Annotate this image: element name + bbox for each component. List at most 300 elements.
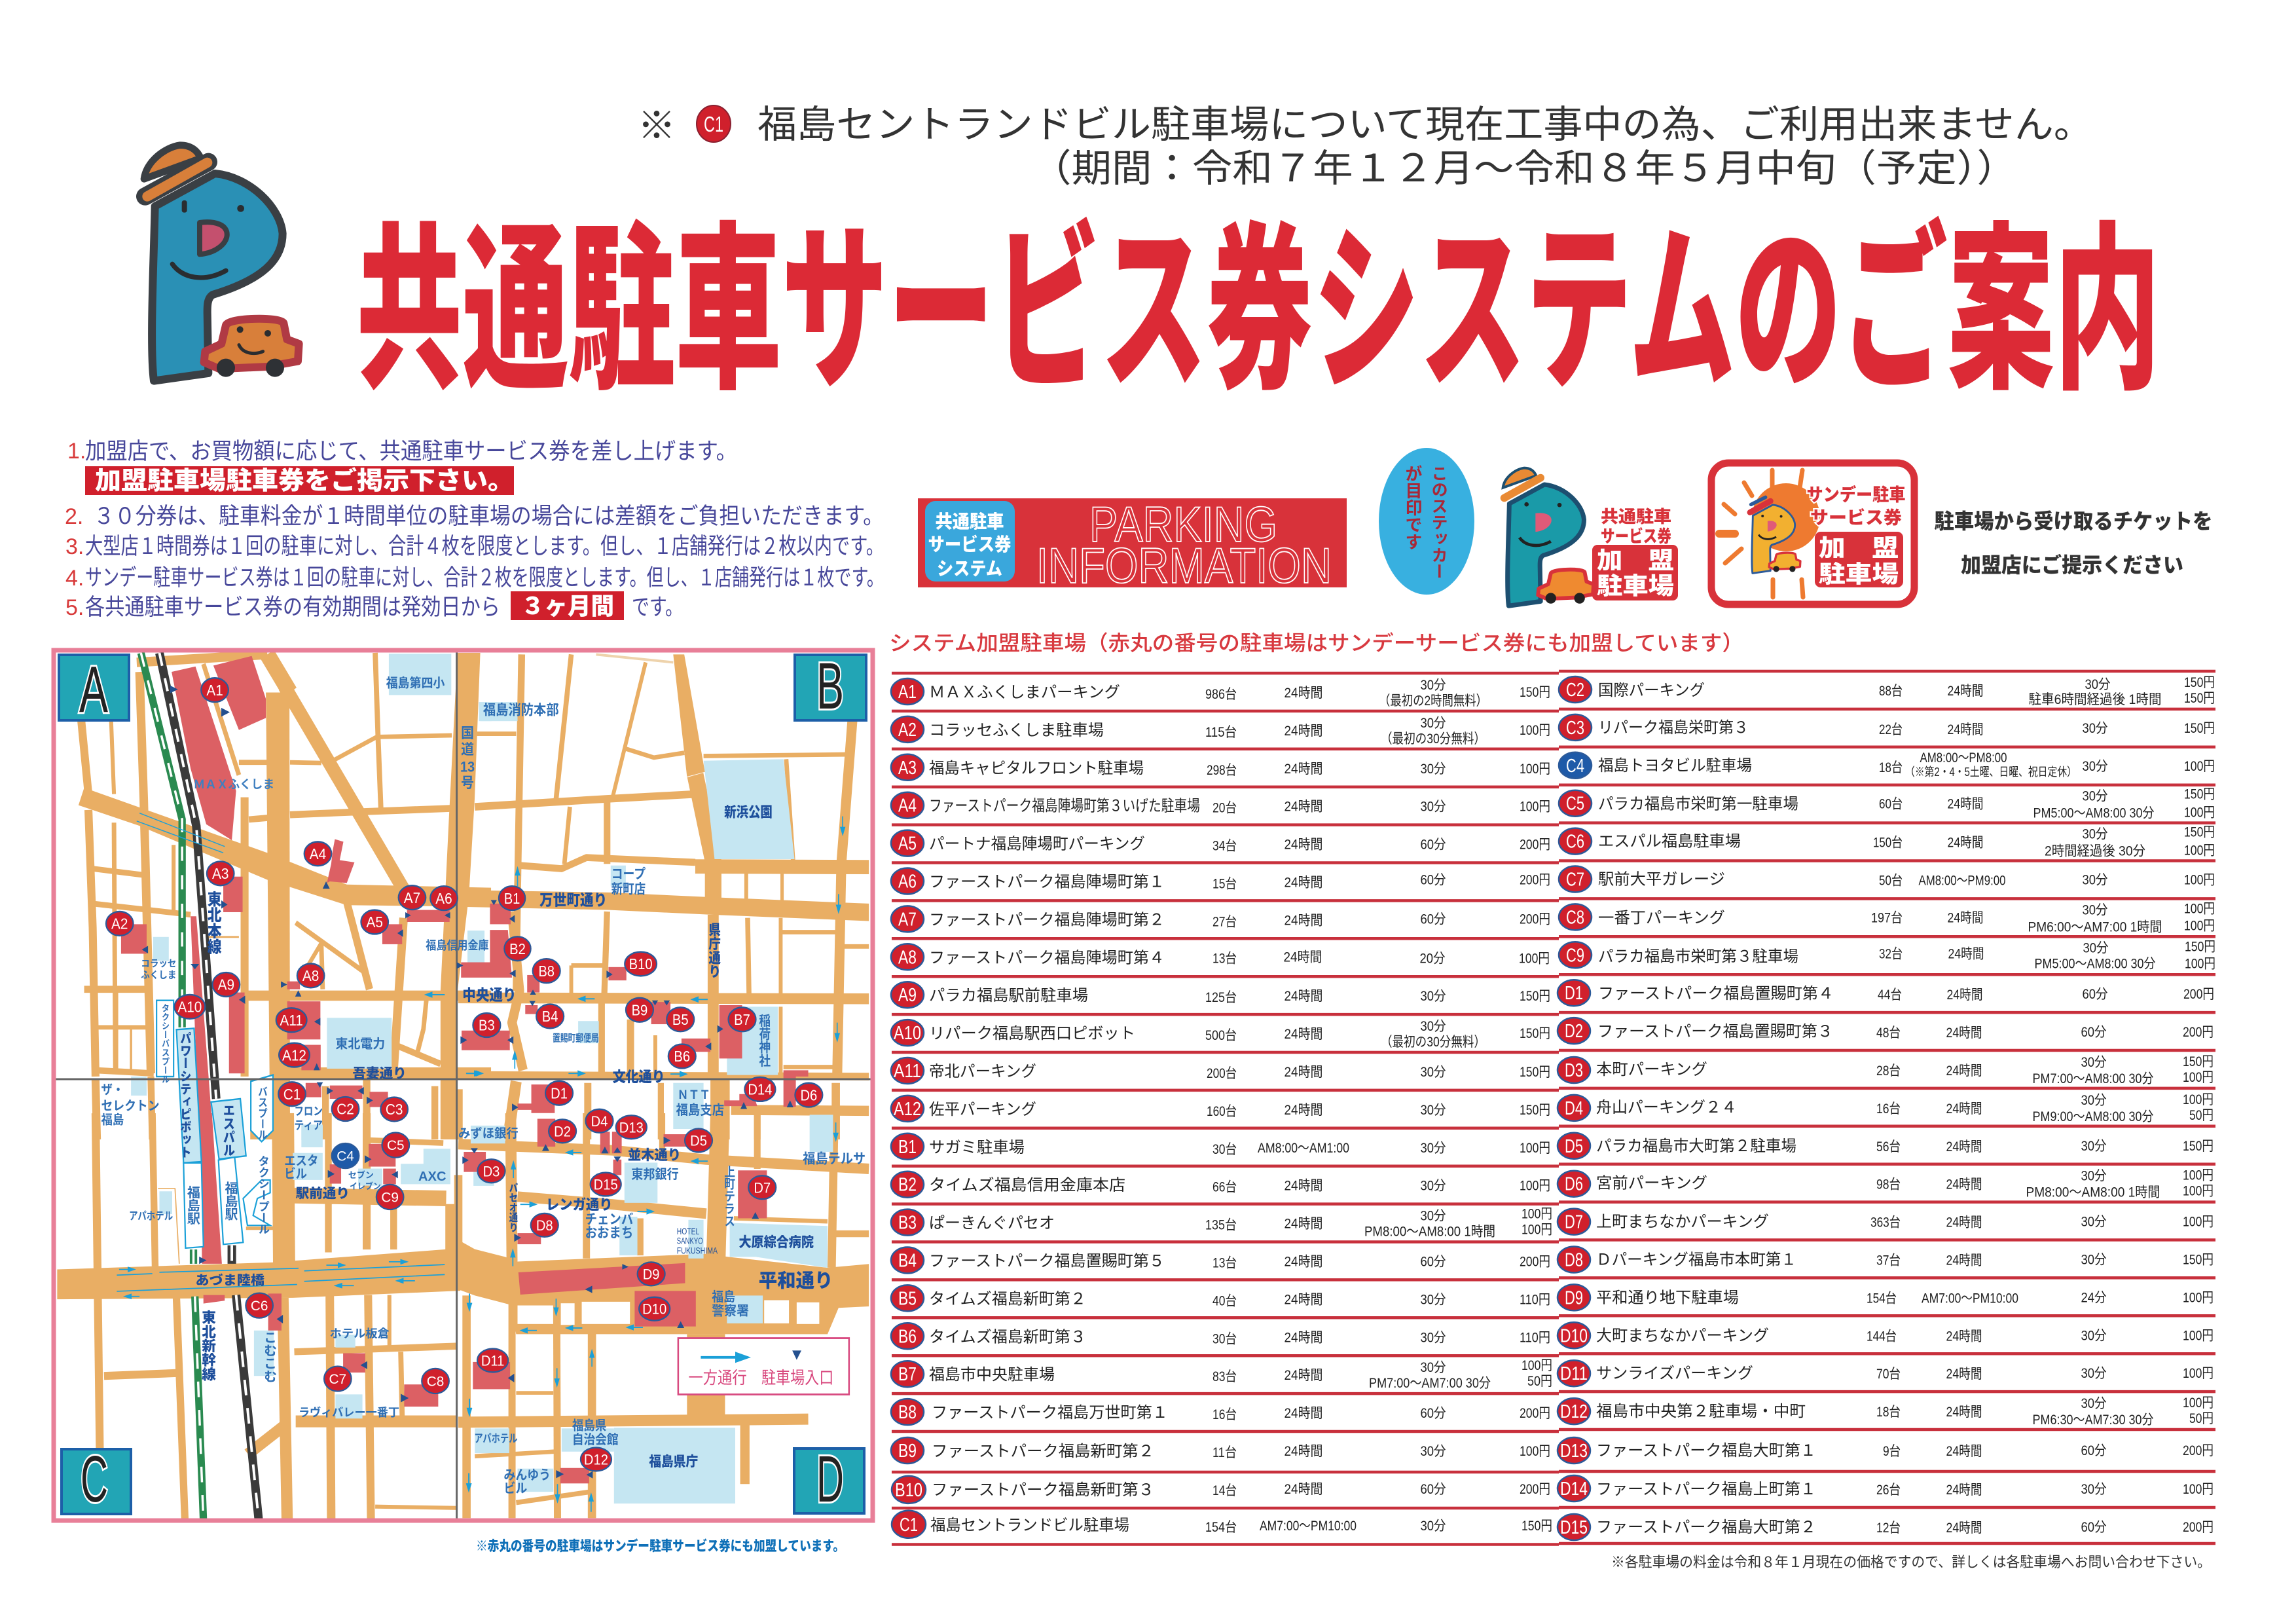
row D6: 24時間 <box>1946 1177 1982 1192</box>
map place labels: バスプール <box>257 1086 267 1140</box>
row D15: 200円 <box>2183 1520 2214 1535</box>
row D6: D6 <box>1565 1174 1583 1195</box>
row C5: C5 <box>1566 794 1584 815</box>
row D6: PM8:00～AM8:00 1時間 <box>2026 1185 2160 1200</box>
row C1: AM7:00～PM10:00 <box>1260 1519 1357 1534</box>
row C9: 150円 <box>2185 939 2215 954</box>
map place labels: 自治会館 <box>572 1432 619 1447</box>
row D9: AM7:00～PM10:00 <box>1922 1291 2018 1306</box>
sunday mascot <box>1750 497 1800 573</box>
row B7: 福島市中央駐車場 <box>929 1366 1055 1384</box>
row D9: 100円 <box>2183 1290 2214 1305</box>
map place labels: セブン <box>348 1170 374 1180</box>
row B7: 83台 <box>1212 1369 1237 1384</box>
map place labels: 福島第四小 <box>386 675 445 690</box>
row C1: C1 <box>900 1515 918 1536</box>
row B3: PM8:00～AM8:00 1時間 <box>1364 1225 1495 1240</box>
row B6: B6 <box>898 1326 917 1347</box>
row A9: パラカ福島駅前駐車場 <box>929 987 1088 1005</box>
table rules <box>892 671 2215 1544</box>
row B9: 24時間 <box>1285 1444 1322 1459</box>
sticker label: 共通駐車 <box>1601 507 1671 526</box>
row D12: D12 <box>1560 1401 1588 1422</box>
row A4: 24時間 <box>1285 800 1322 815</box>
map parking badges: B4 <box>542 1008 558 1025</box>
row A7: 27台 <box>1212 914 1237 929</box>
mascot: P with hat and car <box>144 145 299 381</box>
row C9: C9 <box>1566 945 1584 966</box>
grid label D: D <box>816 1443 844 1516</box>
row D12: 24時間 <box>1946 1405 1982 1420</box>
row C3: 150円 <box>2184 721 2215 736</box>
row D13 <box>1558 1437 2214 1464</box>
map parking badges: B6 <box>674 1048 690 1065</box>
row A5: 24時間 <box>1285 838 1322 853</box>
row A6: ファーストパーク福島陣場町第１ <box>929 874 1165 891</box>
row D5: 56台 <box>1876 1139 1901 1154</box>
row A2: 24時間 <box>1285 724 1322 739</box>
row B8: 200円 <box>1520 1406 1550 1421</box>
map parking badges: C7 <box>329 1372 346 1387</box>
row D10 <box>1558 1322 2214 1348</box>
row C5: 100円 <box>2184 805 2215 821</box>
grid label B <box>795 650 866 723</box>
row D13: D13 <box>1560 1441 1588 1462</box>
row B3 <box>891 1207 1552 1240</box>
map parking badges <box>106 678 822 1471</box>
row A12: 150円 <box>1520 1103 1550 1118</box>
row A7: 24時間 <box>1285 913 1322 928</box>
row C2: 駐車6時間経過後 1時間 <box>2028 692 2162 707</box>
map place labels: 福島 <box>712 1289 735 1304</box>
row B3: B3 <box>898 1213 917 1234</box>
row B7: PM7:00～AM7:00 30分 <box>1369 1376 1491 1391</box>
item 5: です。 <box>632 595 683 620</box>
row D1: 44台 <box>1878 987 1902 1003</box>
row A5: 200円 <box>1520 838 1550 853</box>
map parking badges: A4 <box>310 845 326 862</box>
row A1: 986台 <box>1205 687 1237 702</box>
map parking badges: C1 <box>283 1086 301 1103</box>
map place labels: 福島支店 <box>676 1103 724 1118</box>
map place labels: FUKUSHIMA <box>677 1246 718 1256</box>
map place labels: 大原綜合病院 <box>738 1234 814 1250</box>
row A7 <box>891 906 1550 932</box>
map place labels: おおまち <box>585 1226 633 1241</box>
map place labels: アパホテル <box>474 1433 517 1445</box>
row D10: 100円 <box>2183 1328 2214 1343</box>
row C8: 一番丁パーキング <box>1598 909 1725 927</box>
parking entrance markers <box>142 686 793 1479</box>
row D11: サンライズパーキング <box>1596 1365 1753 1382</box>
row B6: 110円 <box>1520 1330 1550 1345</box>
row D6: 100円 <box>2183 1168 2214 1183</box>
map place labels: 東北電力 <box>335 1036 385 1051</box>
row A6: A6 <box>898 871 917 892</box>
row C4: 福島トヨタビル駐車場 <box>1598 757 1752 775</box>
row A3: A3 <box>898 758 917 779</box>
map place labels: フロン <box>294 1105 323 1118</box>
map place labels: 号 <box>461 775 474 791</box>
row D13: 9台 <box>1883 1444 1901 1459</box>
sticker mascot <box>1503 468 1594 606</box>
row C8: PM6:00～AM7:00 1時間 <box>2028 919 2162 934</box>
map place labels: エスタ <box>284 1154 318 1168</box>
map place labels: 県庁通り <box>706 923 720 978</box>
row D3: 28台 <box>1876 1063 1901 1079</box>
row A12: 30分 <box>1421 1103 1446 1118</box>
map place labels: 新町店 <box>611 881 646 897</box>
row D1: 24時間 <box>1947 987 1982 1003</box>
row A10: A10 <box>894 1023 921 1044</box>
row D4: 舟山パーキング２４ <box>1596 1099 1737 1116</box>
row C4: 18台 <box>1879 760 1903 775</box>
map parking badges: C2 <box>337 1101 354 1118</box>
row B10: 24時間 <box>1285 1482 1322 1497</box>
row C4 <box>1559 750 2215 779</box>
map place labels: みんゆう <box>503 1467 551 1482</box>
row D3: 本町パーキング <box>1596 1061 1707 1079</box>
row D4: 100円 <box>2183 1092 2214 1107</box>
row A1: 150円 <box>1520 685 1550 700</box>
row C5: 60台 <box>1879 797 1903 812</box>
item 3: 大型店１時間券は１回の駐車に対し、合計４枚を限度とします。但し、１店舗発行は２枚以内です。 <box>85 534 884 559</box>
row B4 <box>891 1247 1550 1273</box>
sticker label: 駐車場 <box>1597 572 1674 599</box>
row B5 <box>891 1285 1550 1311</box>
item 1: 1. <box>67 439 86 464</box>
row D3: 24時間 <box>1946 1063 1982 1079</box>
row C7: 50台 <box>1879 874 1903 888</box>
row A6: 24時間 <box>1285 875 1322 891</box>
row A8: 20分 <box>1419 951 1446 966</box>
row A12: A12 <box>894 1099 921 1120</box>
item 5: 各共通駐車サービス券の有効期間は発効日から <box>85 595 500 620</box>
sticker label: 加 盟 <box>1597 547 1674 574</box>
row D8: 150円 <box>2183 1252 2214 1268</box>
grid label B: B <box>816 650 844 723</box>
sunday label: 駐車場 <box>1819 561 1899 587</box>
row B6: タイムズ福島新町第３ <box>929 1328 1086 1346</box>
row C4: C4 <box>1566 756 1584 777</box>
row A8: 100円 <box>1519 951 1550 966</box>
row D6: 98台 <box>1876 1177 1901 1192</box>
row C6: 30分 <box>2082 827 2108 842</box>
parking table left column <box>891 678 1552 1538</box>
row D12: PM6:30～AM7:30 30分 <box>2032 1412 2154 1428</box>
row A2: 30分 <box>1421 716 1446 731</box>
row C7: 100円 <box>2184 872 2215 888</box>
row D14: 26台 <box>1876 1483 1901 1498</box>
row A11: 24時間 <box>1285 1065 1322 1080</box>
row D2: 24時間 <box>1946 1025 1982 1041</box>
row C5: 30分 <box>2082 789 2108 804</box>
parks and facilities <box>131 654 833 1504</box>
row B9: 30分 <box>1421 1444 1446 1459</box>
row C9: 30分 <box>2083 940 2108 955</box>
row A11 <box>891 1058 1550 1084</box>
map place labels: ラヴィバレー一番丁 <box>299 1406 399 1419</box>
map parking badges: C9 <box>381 1190 399 1205</box>
row A11: 帝北パーキング <box>929 1063 1036 1080</box>
item 5: ３ヶ月間 <box>521 593 614 619</box>
row D12: 100円 <box>2183 1395 2214 1411</box>
map place labels: あづま陸橋 <box>196 1273 264 1288</box>
row A1: A1 <box>898 682 917 703</box>
map place labels: 福島 <box>101 1113 124 1127</box>
row A3: 24時間 <box>1285 762 1322 777</box>
row D14: 24時間 <box>1946 1483 1982 1498</box>
row C1: 福島セントランドビル駐車場 <box>930 1517 1129 1534</box>
row C3: 24時間 <box>1947 722 1984 737</box>
sign left label <box>928 511 1011 579</box>
row C7: 駅前大平ガレージ <box>1598 871 1725 888</box>
row A10: 30分 <box>1421 1019 1446 1034</box>
row A4: 30分 <box>1421 800 1446 815</box>
row A10: 500台 <box>1205 1028 1237 1043</box>
row B5: タイムズ福島新町第２ <box>929 1290 1086 1308</box>
map place labels: パワーシティピボット <box>179 1031 192 1158</box>
row D3: 100円 <box>2183 1070 2214 1085</box>
map legend: 駐車場入口 <box>761 1369 833 1388</box>
map parking badges: B7 <box>734 1011 750 1028</box>
map parking badges: B10 <box>629 955 653 973</box>
row D14: 100円 <box>2183 1482 2214 1497</box>
grid label A: A <box>79 653 108 726</box>
map place labels: チェンバ <box>585 1212 634 1227</box>
row D7: 30分 <box>2081 1215 2107 1230</box>
row B1: 100円 <box>1520 1141 1550 1156</box>
row B3: 100円 <box>1522 1223 1552 1238</box>
row D4 <box>1558 1092 2214 1124</box>
row C2 <box>1559 675 2215 707</box>
row A11: 150円 <box>1520 1065 1550 1080</box>
row D10: 30分 <box>2081 1328 2107 1343</box>
PARKING INFORMATION wordmark <box>1036 497 1332 594</box>
grid label D <box>794 1443 864 1516</box>
map parking badges: A5 <box>366 913 383 931</box>
row C2: 30分 <box>2085 677 2111 692</box>
sunday label: サンデー駐車 <box>1807 485 1905 505</box>
row B8 <box>891 1399 1550 1425</box>
row B3: 30分 <box>1421 1209 1446 1224</box>
row C2: 24時間 <box>1947 684 1984 699</box>
map place labels: セレクトン <box>101 1098 159 1113</box>
highlighted banner: 加盟駐車場駐車券をご掲示下さい。 <box>95 467 514 495</box>
row A5: パートナ福島陣場町パーキング <box>929 836 1145 853</box>
row A2: （最初の30分無料） <box>1381 731 1485 747</box>
row B3: 100円 <box>1522 1207 1552 1222</box>
map parking badges: B3 <box>479 1016 495 1034</box>
row C7: 30分 <box>2082 872 2108 888</box>
row A4: ファーストパーク福島陣場町第３いげた駐車場 <box>929 798 1200 815</box>
row A4: 100円 <box>1520 800 1550 815</box>
row D11: 30分 <box>2081 1366 2107 1381</box>
map parking badges: D15 <box>594 1177 618 1193</box>
row D14 <box>1558 1475 2214 1502</box>
row C4: AM8:00～PM8:00 <box>1920 750 2007 766</box>
row A9: 30分 <box>1421 989 1446 1004</box>
map parking badges: D7 <box>754 1179 771 1196</box>
row B1: 30分 <box>1421 1141 1446 1156</box>
row B10 <box>892 1476 1550 1504</box>
map place labels: 福島消防本部 <box>483 702 559 718</box>
row D10: 144台 <box>1867 1329 1897 1344</box>
railway lines <box>137 653 259 1521</box>
row D12: 福島市中央第２駐車場・中町 <box>1596 1403 1806 1420</box>
row D7: 24時間 <box>1946 1215 1982 1230</box>
map parking badges: B5 <box>672 1011 689 1028</box>
map place labels: HOTEL <box>677 1226 700 1236</box>
row D6: 宮前パーキング <box>1596 1175 1707 1192</box>
row D8: 30分 <box>2081 1252 2107 1268</box>
map parking badges: C5 <box>387 1138 405 1153</box>
row A1: 24時間 <box>1285 686 1322 701</box>
map place labels: 東北新幹線 <box>200 1310 217 1381</box>
row B8: ファーストパーク福島万世町第１ <box>932 1404 1168 1422</box>
row A7: ファーストパーク福島陣場町第２ <box>929 911 1165 929</box>
row D3: D3 <box>1565 1060 1583 1081</box>
map place labels: ビル <box>284 1167 307 1181</box>
row D2: 60分 <box>2081 1025 2107 1040</box>
ticket instruction <box>1934 509 2213 577</box>
map parking badges: D11 <box>481 1352 504 1369</box>
ticket instruction: 駐車場から受け取るチケットを <box>1934 509 2213 533</box>
row D5 <box>1558 1133 2214 1159</box>
row C9: 24時間 <box>1948 946 1984 961</box>
row B4: 24時間 <box>1285 1255 1322 1269</box>
row A8 <box>891 944 1550 970</box>
row B1: 30台 <box>1212 1142 1237 1157</box>
row A1: 30分 <box>1421 678 1446 693</box>
row D2 <box>1558 1018 2214 1044</box>
row D5: D5 <box>1565 1136 1583 1157</box>
row A9: 125台 <box>1205 990 1237 1005</box>
map panel <box>54 650 873 1521</box>
row C2: 150円 <box>2184 675 2215 690</box>
row B2: B2 <box>898 1175 917 1196</box>
row D15 <box>1558 1514 2214 1540</box>
row C1: 30分 <box>1421 1519 1446 1534</box>
map parking badges: B9 <box>632 1001 647 1019</box>
PARKING INFORMATION wordmark: INFORMATION <box>1036 538 1332 594</box>
row D2: 200円 <box>2183 1025 2214 1040</box>
row A6: 200円 <box>1520 872 1550 888</box>
row B6 <box>891 1323 1550 1349</box>
grid label C <box>62 1443 131 1516</box>
row B9: B9 <box>898 1441 917 1462</box>
row D7: 363台 <box>1870 1215 1901 1230</box>
row B10: 60分 <box>1421 1482 1446 1497</box>
row B5: 30分 <box>1421 1292 1446 1307</box>
row D11: 70台 <box>1876 1367 1901 1382</box>
item 5: 5. <box>65 595 84 620</box>
sunday sticker <box>1711 463 1914 604</box>
map parking badges: C8 <box>427 1374 444 1389</box>
row D7: 100円 <box>2183 1215 2214 1230</box>
row A12: 24時間 <box>1285 1103 1322 1118</box>
row A1 <box>891 678 1550 709</box>
grid label C: C <box>81 1443 108 1516</box>
price footnote: ※各駐車場の料金は令和８年１月現在の価格ですので、詳しくは各駐車場へお問い合わせ下さい。 <box>1611 1554 2211 1570</box>
sign left label: システム <box>937 559 1002 579</box>
row B7: B7 <box>898 1364 917 1385</box>
row C1: 150円 <box>1522 1519 1552 1534</box>
map parking badges: A9 <box>218 976 234 993</box>
map place labels: 東邦銀行 <box>631 1167 679 1181</box>
sticker label <box>1592 507 1678 600</box>
table heading: システム加盟駐車場（赤丸の番号の駐車場はサンデーサービス券にも加盟しています） <box>889 631 1744 655</box>
row D15: 12台 <box>1876 1521 1901 1536</box>
map parking badges: D5 <box>690 1132 707 1149</box>
row D4: 50円 <box>2189 1108 2214 1123</box>
row A1: （最初の2時間無料） <box>1379 693 1487 709</box>
map parking badges: B2 <box>509 940 526 957</box>
map place labels: ティア <box>294 1119 323 1132</box>
parking table right column <box>1558 675 2215 1540</box>
row D1: 200円 <box>2183 987 2214 1002</box>
row C3: C3 <box>1566 718 1584 739</box>
row D6: 30分 <box>2081 1169 2107 1184</box>
map place labels: 福島県庁 <box>649 1454 698 1469</box>
row B4: 200円 <box>1520 1255 1550 1269</box>
map place labels: イレブン <box>350 1181 381 1191</box>
map place labels: 新浜公園 <box>724 804 773 821</box>
map parking badges: D14 <box>748 1080 772 1098</box>
item 4: サンデー駐車サービス券は１回の駐車に対し、合計２枚を限度とします。但し、１店舗発行は１枚です。 <box>85 565 884 591</box>
row A10: リパーク福島駅西口ピボット <box>929 1025 1135 1043</box>
item 3: 3. <box>65 534 84 559</box>
row D7: D7 <box>1565 1212 1583 1233</box>
map place labels: 福島駅 <box>185 1185 200 1225</box>
row C9 <box>1559 939 2215 971</box>
map parking badges: D1 <box>551 1084 568 1102</box>
sun rays <box>1719 470 1803 597</box>
map parking badges: D12 <box>584 1451 608 1468</box>
row D8: 37台 <box>1876 1253 1901 1268</box>
row A10 <box>891 1019 1550 1050</box>
row A9: 150円 <box>1520 989 1550 1004</box>
row C1: 154台 <box>1205 1520 1237 1535</box>
row B7: 50円 <box>1527 1374 1552 1389</box>
row C7: AM8:00～PM9:00 <box>1918 874 2006 888</box>
PARKING INFORMATION wordmark: PARKING <box>1089 497 1277 553</box>
map place labels: パセオ通り <box>507 1183 518 1232</box>
map parking badges: C6 <box>251 1299 268 1314</box>
C1 badge: C1 <box>704 112 723 136</box>
map parking badges: A11 <box>280 1012 303 1029</box>
row D9: 平和通り地下駐車場 <box>1596 1289 1739 1306</box>
map parking badges: D9 <box>643 1266 660 1283</box>
blue oval callout: このステッカー <box>1429 465 1448 580</box>
map place labels: 文化通り <box>613 1069 665 1085</box>
row B4: 60分 <box>1421 1255 1446 1269</box>
row C1 <box>892 1511 1552 1538</box>
sunday label: 加 盟 <box>1819 534 1899 561</box>
row D9: 24分 <box>2081 1290 2107 1305</box>
map parking badges: A3 <box>212 865 228 882</box>
row B10: B10 <box>895 1480 922 1501</box>
map place labels: こむこむ <box>261 1331 276 1383</box>
row D3 <box>1558 1054 2214 1086</box>
map place labels <box>101 675 866 1496</box>
row C6: 100円 <box>2184 843 2215 858</box>
row D7 <box>1558 1209 2214 1235</box>
row B7: 30分 <box>1421 1360 1446 1375</box>
map border <box>54 650 873 1521</box>
map parking badges: C3 <box>386 1101 403 1118</box>
item 2: ３０分券は、駐車料金が１時間単位の駐車場の場合には差額をご負担いただきます。 <box>94 504 884 529</box>
